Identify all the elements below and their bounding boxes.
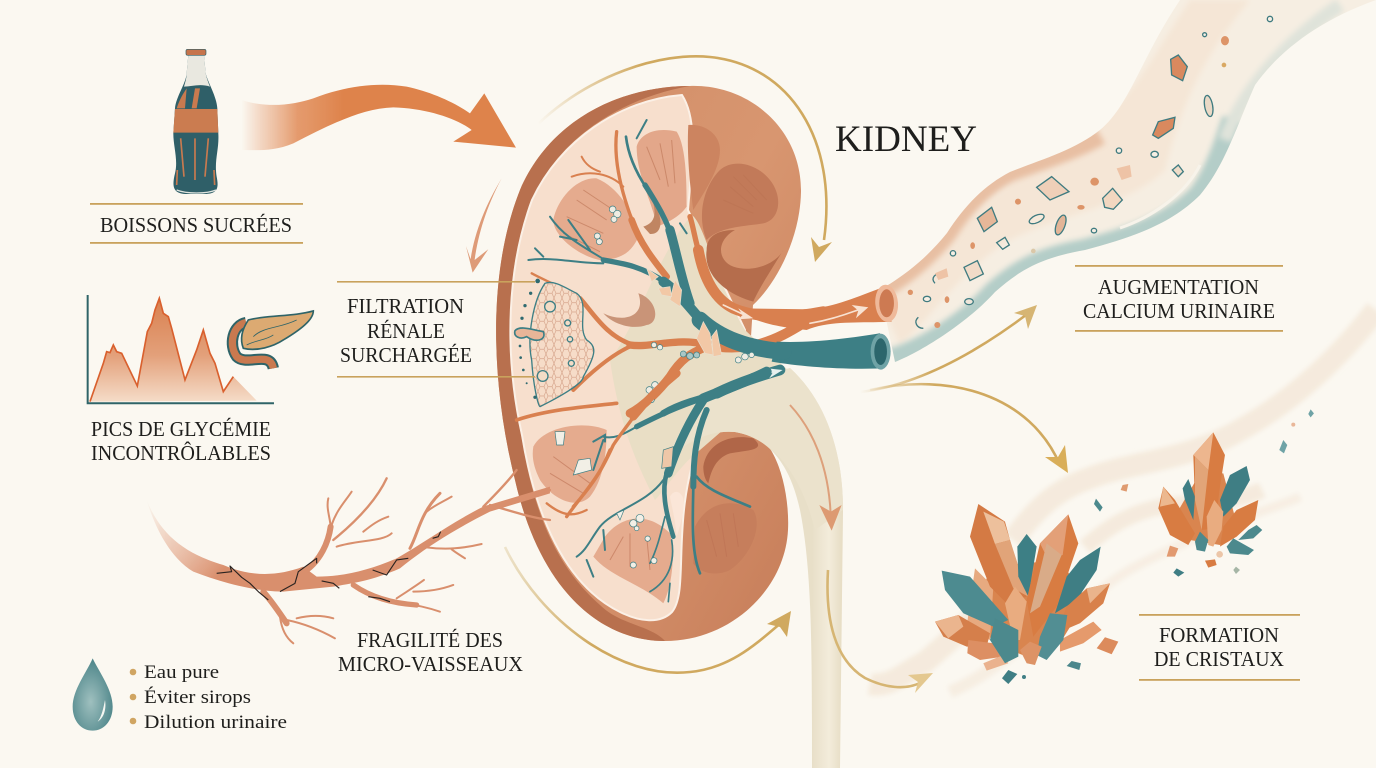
arrow: gold arc over kidney	[538, 56, 832, 262]
lower kidney detail	[517, 372, 767, 603]
arrow: gold arc under kidney	[505, 547, 791, 673]
list: hydration tips: Dilution urinaire	[144, 712, 287, 733]
label: pics de glycemie: PICS DE GLYCÉMIE	[91, 417, 271, 441]
stream zoomed particles	[908, 16, 1273, 328]
label: formation de cristaux: FORMATION	[1159, 623, 1279, 647]
label: filtration	[337, 281, 535, 378]
icon: pancreas	[232, 311, 313, 368]
kidney	[496, 86, 900, 768]
label: filtration: FILTRATION	[347, 294, 464, 318]
cortex pale area	[510, 95, 745, 620]
label: augmentation: CALCIUM URINAIRE	[1083, 299, 1275, 323]
arrow: ureter to crystals	[827, 570, 933, 693]
label: fragilite	[338, 628, 523, 676]
chart: blood sugar peaks	[88, 295, 274, 403]
list: hydration tips	[130, 662, 287, 733]
label: formation de cristaux	[1139, 614, 1300, 681]
arrow: to filtration	[466, 178, 502, 273]
crystals: small cluster	[1094, 409, 1314, 577]
label: fragilite: FRAGILITÉ DES	[357, 628, 503, 652]
arrow: to crystals	[870, 384, 1068, 473]
label: filtration: SURCHARGÉE	[340, 343, 472, 367]
crystals: large cluster	[935, 504, 1118, 684]
list: hydration tips: Éviter sirops	[144, 686, 251, 708]
tube ends	[733, 284, 900, 370]
flow arrows	[723, 305, 868, 388]
label: augmentation	[1075, 265, 1283, 332]
label: augmentation: AUGMENTATION	[1098, 275, 1259, 299]
twigs	[263, 470, 550, 643]
stone deposits	[594, 206, 754, 403]
icon: soda bottle	[173, 49, 218, 194]
teal vein	[528, 120, 883, 413]
arrow: bottle to kidney	[242, 85, 516, 150]
pyramids	[553, 125, 783, 327]
kidney rim	[496, 86, 690, 641]
label: pics de glycemie	[91, 417, 271, 465]
micro-vessel branch	[147, 470, 550, 643]
lower vessels	[577, 372, 767, 602]
label: pics de glycemie: INCONTRÔLABLES	[91, 441, 271, 465]
title: KIDNEY	[835, 119, 977, 160]
orange vessels	[532, 132, 823, 413]
label: formation de cristaux: DE CRISTAUX	[1154, 647, 1284, 671]
icon: water drop	[73, 658, 113, 731]
trunk	[147, 487, 550, 592]
cracks	[217, 532, 441, 602]
arrow: ureter down	[790, 405, 842, 531]
lower stream with brush strokes	[870, 310, 1376, 692]
kidney body	[496, 86, 801, 641]
lower pyramids	[533, 425, 758, 603]
urine flow stream with particles	[872, 0, 1376, 362]
lower stones	[555, 432, 673, 568]
label: boissons sucrees: BOISSONS SUCRÉES	[100, 213, 292, 237]
label: fragilite: MICRO-VAISSEAUX	[338, 652, 523, 676]
upper kidney detail	[515, 120, 900, 413]
ureter	[665, 368, 843, 768]
honeycomb filtration unit	[515, 279, 594, 407]
arrow: to calcium	[860, 305, 1037, 392]
list: hydration tips: Eau pure	[144, 662, 219, 683]
label: filtration: RÉNALE	[367, 319, 445, 343]
renal sinus	[610, 215, 790, 500]
